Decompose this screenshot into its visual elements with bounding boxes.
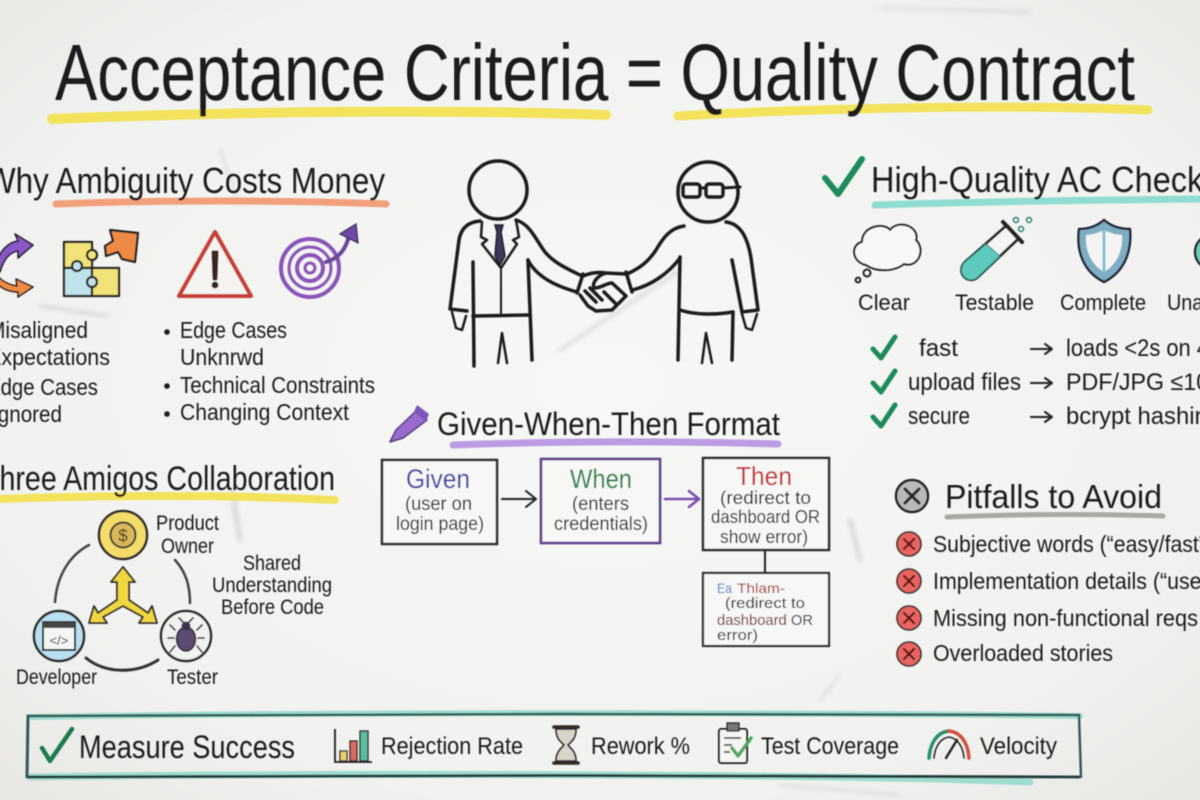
arrow: three way yellow — [89, 567, 157, 623]
icon: grey x circle — [896, 480, 928, 512]
box: then: (redirect to — [720, 488, 811, 508]
icon: hourglass — [554, 727, 578, 763]
icon: circular arrows — [0, 234, 33, 297]
icon: developer browser — [34, 611, 84, 661]
icon: cloud — [854, 225, 920, 282]
box: given: Given — [406, 464, 470, 494]
label: rejection rate: Rejection Rate — [381, 733, 523, 760]
icon: puzzle — [64, 230, 138, 296]
text block: edge cases list: Changing Context — [180, 399, 350, 425]
panel: measure success footer — [27, 713, 1081, 782]
icon: unambiguous partial circle — [1195, 235, 1200, 269]
checklist row: fast — [873, 335, 1200, 362]
icon: product owner coin — [99, 511, 147, 559]
box: lower then: dashboard OR — [717, 612, 813, 629]
box: given: login page) — [396, 514, 484, 535]
box: lower then: (redirect to — [725, 595, 805, 612]
checklist row: secure: secure — [908, 403, 970, 430]
box: then: show error) — [720, 527, 808, 547]
pitfall: overloaded stories: Overloaded stories — [933, 640, 1113, 666]
illustration: handshake figures — [450, 161, 758, 366]
label: rework: Rework % — [591, 733, 690, 760]
box: lower then: Thlam- — [737, 580, 785, 596]
label: shared understanding: Before Code — [221, 596, 324, 619]
icon: target with arrow — [281, 224, 358, 297]
label: velocity: Velocity — [980, 733, 1057, 760]
label: product owner — [156, 512, 219, 558]
icon: handshake — [577, 272, 632, 311]
label: measure success: Measure Success — [79, 729, 295, 765]
box: when: (enters — [572, 494, 629, 515]
text block: edge cases list: Edge Cases — [180, 317, 287, 343]
text block: misaligned list — [0, 317, 110, 427]
checklist row: secure — [873, 403, 1200, 430]
panel: high-quality ac checklist — [825, 159, 1200, 430]
checklist row: fast: fast — [919, 335, 958, 362]
panel: why ambiguity costs money — [0, 160, 386, 427]
label: testable: Testable — [955, 290, 1034, 315]
box: lower then — [703, 573, 829, 646]
label: shared understanding: Shared — [243, 552, 301, 575]
text block: edge cases list: Unknrwd — [180, 344, 264, 370]
arrow: when to then — [665, 491, 699, 507]
footer frame — [27, 713, 1081, 782]
icon: shield — [1078, 220, 1130, 282]
icon: bar chart — [335, 729, 372, 762]
checklist row: upload files: upload files — [908, 369, 1021, 396]
label: shared understanding — [212, 552, 332, 619]
label: product owner: Owner — [161, 535, 214, 558]
figure: business person — [450, 161, 582, 366]
panel: given-when-then format — [382, 405, 829, 646]
icon: clipboard — [719, 723, 751, 763]
icon: purple marker — [390, 405, 429, 442]
icon: test tube — [961, 218, 1032, 280]
box: then: Then — [736, 461, 792, 491]
icon: green check — [825, 159, 862, 194]
heading: pitfalls: Pitfalls to Avoid — [945, 478, 1162, 515]
panel: pitfalls to avoid — [896, 478, 1200, 666]
arrow: given to when — [502, 491, 536, 507]
label: product owner: Product — [156, 512, 219, 535]
box: lower then: error) — [717, 627, 758, 644]
icon: tie — [495, 225, 505, 265]
label: complete: Complete — [1060, 290, 1146, 315]
icon: gauge — [929, 731, 969, 758]
label: test coverage: Test Coverage — [761, 733, 899, 760]
text block: edge cases list: Technical Constraints — [180, 372, 375, 398]
panel: three amigos collaboration — [0, 460, 335, 689]
box: given: (user on — [405, 494, 472, 515]
label: developer: Developer — [16, 666, 97, 689]
icon: footer check — [42, 729, 72, 761]
text block: edge cases list — [164, 317, 375, 425]
label: shared understanding: Understanding — [212, 574, 332, 597]
icon: developer browser: </> — [50, 633, 68, 648]
box: then: dashboard OR — [711, 507, 820, 527]
icon: tester bug — [161, 611, 211, 661]
heading: given when then: Given-When-Then Format — [437, 406, 780, 442]
box: lower then: Ea — [717, 580, 732, 596]
box: when: When — [570, 464, 632, 494]
figure: developer with glasses — [627, 162, 758, 363]
label: tester: Tester — [167, 666, 218, 689]
box: given — [382, 460, 497, 544]
checklist row: upload files — [873, 369, 1200, 396]
box: then — [703, 458, 829, 550]
label: clear: Clear — [858, 290, 910, 315]
icon: warning triangle — [179, 232, 251, 296]
icon: product owner coin: $ — [118, 526, 128, 545]
box: when: credentials) — [554, 514, 648, 535]
connecting arcs — [55, 545, 190, 670]
box: when — [541, 459, 660, 543]
